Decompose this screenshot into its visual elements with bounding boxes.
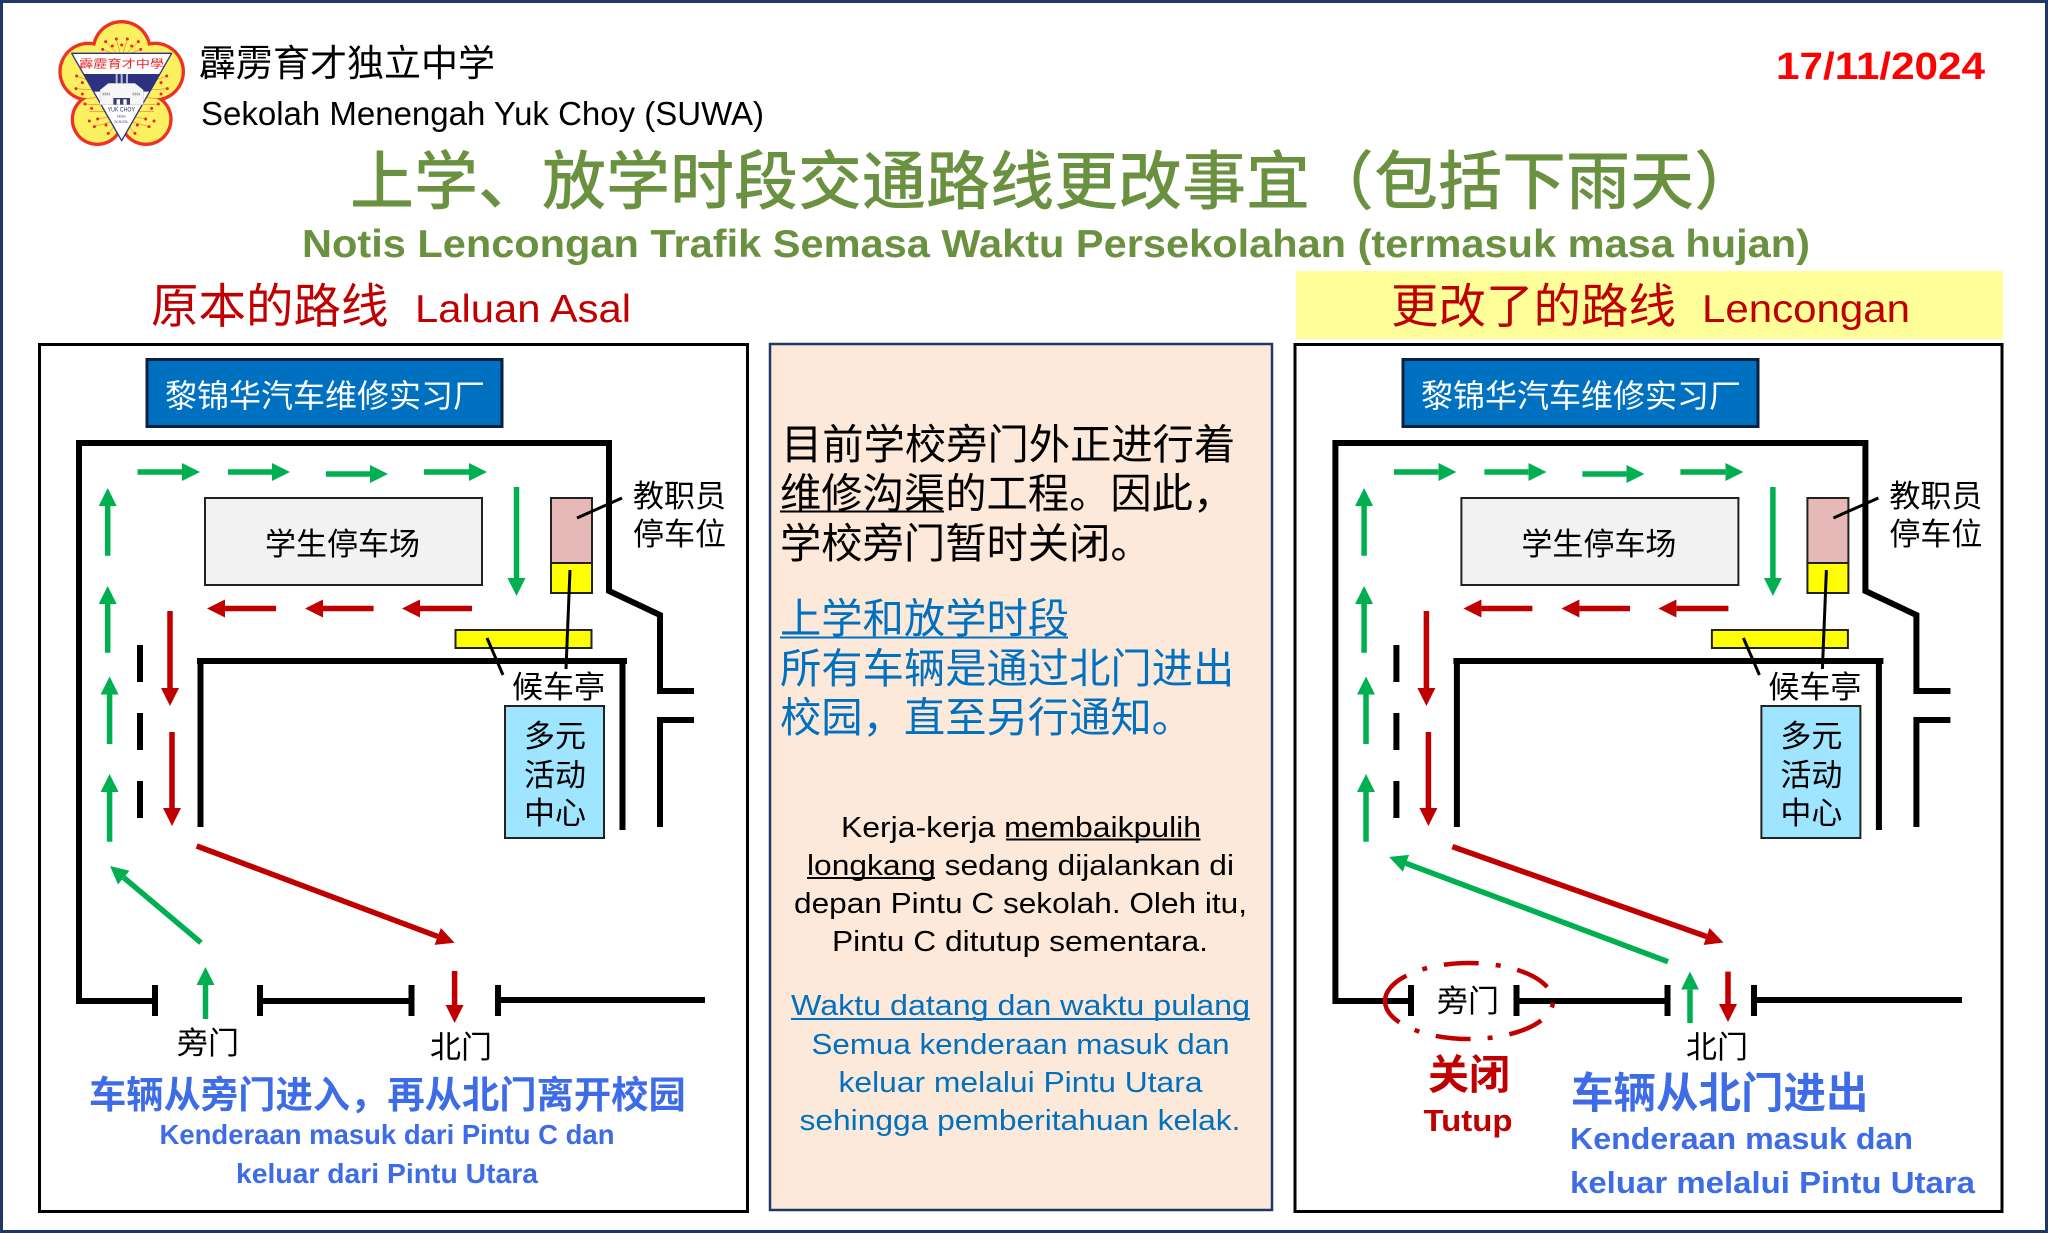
closed gate ring: 旁门 xyxy=(1437,984,1499,1019)
multipurpose centre xyxy=(1761,706,1860,838)
icon: school logo: 霹靂育才中學 xyxy=(79,56,164,70)
school name: 霹雳育才独立中学 xyxy=(199,43,495,84)
icon: school logo: HIGH xyxy=(117,114,126,118)
staff parking: 教职员 xyxy=(1889,479,1982,514)
caption xyxy=(1570,1071,1976,1200)
bus shelter: 候车亭 xyxy=(1768,670,1861,705)
workshop label xyxy=(147,360,502,426)
panel: original route xyxy=(40,344,748,1212)
green entry arrows xyxy=(108,472,516,1019)
Malay notice: depan Pintu C sekolah. Oleh itu, xyxy=(794,888,1247,920)
staff parking xyxy=(1807,479,1982,593)
workshop label xyxy=(1403,360,1758,426)
title: Malay: Notis Lencongan Trafik Semasa Waktu Persekolahan (termasuk masa hujan) xyxy=(302,223,1810,266)
student parking xyxy=(1461,498,1738,585)
Chinese directive: 所有车辆是通过北门进出 xyxy=(780,646,1234,692)
heading: changed route xyxy=(1296,271,2003,339)
panel: changed route xyxy=(1295,344,2002,1212)
Chinese notice: 维修沟渠的工程。因此， xyxy=(780,471,1234,517)
Malay directive: Semua kenderaan masuk dan xyxy=(812,1029,1230,1061)
caption: 车辆从北门进出 xyxy=(1571,1071,1869,1118)
title: Chinese: 上学、放学时段交通路线更改事宜（包括下雨天） xyxy=(350,146,1758,218)
north gate label: 北门 xyxy=(1686,1030,1748,1065)
multipurpose centre: 多元 xyxy=(1780,719,1842,754)
red exit arrows xyxy=(1426,608,1728,1004)
bus shelter xyxy=(1712,570,1861,705)
multipurpose centre: 中心 xyxy=(1780,796,1842,831)
staff parking: 停车位 xyxy=(1889,517,1982,552)
icon: school logo xyxy=(58,20,185,146)
caption: keluar dari Pintu Utara xyxy=(236,1158,538,1189)
Chinese notice: 学校旁门暂时关闭。 xyxy=(780,521,1152,567)
Malay directive xyxy=(791,990,1250,1137)
staff parking xyxy=(551,479,726,593)
date: 17/11/2024 xyxy=(1776,46,1985,88)
icon: school logo: YUK CHOY xyxy=(108,106,135,113)
green entry arrows xyxy=(1364,472,1773,1023)
student parking: 学生停车场 xyxy=(265,527,420,562)
closed gate ring xyxy=(1385,963,1553,1039)
caption: Kenderaan masuk dari Pintu C dan xyxy=(160,1119,614,1150)
heading: original route: 原本的路线 xyxy=(151,281,388,334)
closed label: 关闭 xyxy=(1428,1052,1510,1098)
multipurpose centre: 多元 xyxy=(524,719,586,754)
Chinese directive: 校园，直至另行通知。 xyxy=(780,695,1193,741)
heading: changed route: 更改了的路线 xyxy=(1391,281,1676,334)
student parking: 学生停车场 xyxy=(1521,527,1676,562)
multipurpose centre xyxy=(505,706,604,838)
Chinese notice: 目前学校旁门外正进行着 xyxy=(781,422,1235,468)
Malay notice: longkang sedang dijalankan di xyxy=(807,850,1234,882)
multipurpose centre: 活动 xyxy=(1780,758,1842,793)
closed label xyxy=(1424,1052,1512,1138)
school name: Sekolah Menengah Yuk Choy (SUWA) xyxy=(201,95,764,132)
caption: keluar melalui Pintu Utara xyxy=(1570,1165,1976,1200)
student parking xyxy=(205,498,482,585)
workshop label: 黎锦华汽车维修实习厂 xyxy=(1421,378,1741,414)
staff parking: 停车位 xyxy=(633,517,726,552)
school name xyxy=(199,43,764,132)
Malay directive: Waktu datang dan waktu pulang xyxy=(791,990,1250,1022)
staff parking: 教职员 xyxy=(633,479,726,514)
Malay directive: keluar melalui Pintu Utara xyxy=(838,1067,1203,1099)
caption: Kenderaan masuk dan xyxy=(1570,1121,1913,1156)
Chinese directive xyxy=(780,596,1234,741)
campus walls xyxy=(76,443,705,1016)
caption: 车辆从旁门进入，再从北门离开校园 xyxy=(89,1074,686,1116)
panel: explanation xyxy=(770,344,1272,1210)
caption xyxy=(89,1074,686,1189)
closed label: Tutup xyxy=(1424,1103,1512,1138)
heading: original route xyxy=(151,281,631,334)
multipurpose centre: 中心 xyxy=(524,796,586,831)
gate labels: 北门 xyxy=(430,1030,492,1065)
Chinese notice xyxy=(780,422,1235,567)
Malay notice: Kerja-kerja membaikpulih xyxy=(841,812,1201,844)
gate labels xyxy=(177,1026,492,1065)
multipurpose centre: 活动 xyxy=(524,758,586,793)
Malay notice: Pintu C ditutup sementara. xyxy=(832,926,1208,958)
icon: school logo: SCHOOL xyxy=(114,120,129,124)
gate labels: 旁门 xyxy=(177,1026,239,1061)
heading: original route: Laluan Asal xyxy=(415,288,631,331)
Malay directive: sehingga pemberitahuan kelak. xyxy=(800,1105,1240,1137)
Chinese directive: 上学和放学时段 xyxy=(780,596,1069,642)
bus shelter xyxy=(456,570,605,705)
heading: changed route: Lencongan xyxy=(1702,288,1910,331)
Malay notice xyxy=(794,812,1247,958)
red exit arrows xyxy=(170,608,472,1005)
campus walls xyxy=(1332,443,1962,1016)
workshop label: 黎锦华汽车维修实习厂 xyxy=(165,378,485,414)
bus shelter: 候车亭 xyxy=(512,670,605,705)
